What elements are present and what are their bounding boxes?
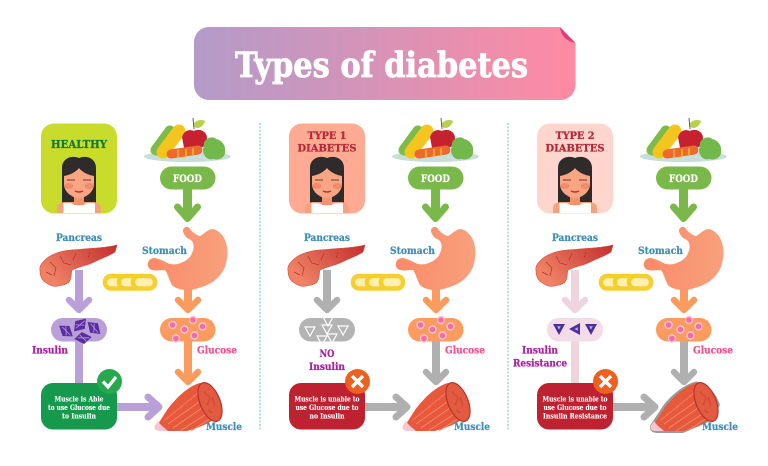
label: no insulin: NO — [320, 348, 334, 360]
outcome box: Muscle is Able — [54, 394, 104, 404]
label: glucose: Glucose — [693, 344, 733, 356]
insulin pill — [51, 315, 107, 347]
icon: food — [392, 118, 479, 162]
icon: food — [640, 118, 727, 162]
arrow: pancreas to insulin — [69, 270, 89, 310]
outcome box: Insulin Resistance — [543, 412, 607, 420]
icon: muscle — [650, 379, 723, 433]
outcome box: no Insulin — [310, 412, 345, 420]
outcome box: to use Glucose due — [48, 403, 110, 412]
food pill: FOOD — [669, 173, 698, 185]
outcome box — [289, 383, 365, 430]
insulin stem — [75, 340, 83, 386]
arrow: pancreas to insulin — [565, 270, 585, 310]
arrow: stomach to glucose — [426, 285, 446, 310]
outcome box: Muscle is unable to — [542, 394, 608, 404]
divider: left — [259, 123, 261, 431]
glucose pill — [656, 316, 712, 342]
food pill — [656, 166, 712, 190]
label: stomach: Stomach — [142, 245, 187, 257]
arrow: food to stomach — [674, 189, 694, 218]
insulin stem — [571, 340, 579, 386]
icon: muscle — [155, 379, 227, 431]
panel: healthy — [32, 118, 242, 433]
title banner — [194, 27, 576, 100]
type 2 portrait card: TYPE 2 — [556, 130, 594, 142]
label: pancreas: Pancreas — [552, 232, 598, 244]
label: stomach: Stomach — [638, 245, 683, 257]
icon: pancreas — [288, 245, 365, 286]
arrow: stomach to glucose — [674, 285, 694, 310]
label: glucose: Glucose — [445, 344, 485, 356]
label: muscle: Muscle — [702, 421, 738, 433]
food pill: FOOD — [421, 173, 450, 185]
icon: stomach — [644, 227, 723, 290]
icon: stomach — [396, 227, 475, 290]
label: insulin resistance: Resistance — [513, 358, 567, 370]
outcome box: use Glucose due to — [296, 403, 359, 412]
icon: cross badge — [345, 369, 370, 394]
icon: chain — [353, 276, 403, 288]
label: muscle: Muscle — [454, 421, 490, 433]
outcome box: Muscle is unable to — [294, 394, 360, 404]
glucose stem arrow — [178, 340, 198, 382]
title text: Types of diabetes — [235, 45, 528, 86]
icon: pancreas — [536, 245, 613, 286]
icon: stomach — [148, 227, 227, 290]
arrow: food to stomach — [426, 189, 446, 218]
label: no insulin: Insulin — [309, 361, 345, 373]
type 2 portrait card — [537, 124, 613, 214]
label: no insulin — [309, 348, 345, 373]
glucose stem arrow — [674, 340, 694, 382]
type 1 portrait card: DIABETES — [298, 142, 356, 154]
outcome box — [537, 383, 613, 430]
type 1 portrait card: TYPE 1 — [308, 130, 346, 142]
outcome box — [41, 383, 117, 430]
arrow: stomach to glucose — [178, 285, 198, 310]
label: insulin resistance: Insulin — [522, 344, 558, 356]
label: insulin: Insulin — [32, 344, 68, 356]
arrow: box to muscle — [115, 397, 159, 417]
healthy portrait card — [41, 124, 117, 214]
type 2 portrait card: DIABETES — [546, 142, 604, 154]
healthy portrait card: HEALTHY — [51, 138, 107, 151]
arrow: food to stomach — [178, 189, 198, 218]
label: insulin resistance — [513, 344, 567, 370]
icon: check badge — [97, 369, 122, 394]
glucose stem arrow — [426, 340, 446, 382]
icon: pancreas — [40, 245, 117, 286]
icon: muscle — [403, 379, 475, 431]
food pill — [408, 166, 464, 190]
label: pancreas: Pancreas — [304, 232, 350, 244]
divider: right — [507, 123, 509, 431]
icon: food — [144, 118, 231, 162]
icon: chain — [105, 276, 155, 288]
outcome box: to Insulin — [62, 412, 97, 420]
label: stomach: Stomach — [390, 245, 435, 257]
arrow: pancreas to no insulin — [317, 270, 337, 310]
outcome box: use Glucose due to — [544, 403, 607, 412]
no insulin pill — [299, 317, 355, 345]
panel: type 2 diabetes — [513, 118, 738, 433]
icon: cross badge — [593, 369, 618, 394]
insulin resistance pill — [547, 318, 603, 342]
glucose pill — [160, 316, 216, 342]
label: muscle: Muscle — [206, 421, 242, 433]
food pill — [160, 166, 216, 190]
icon: chain — [601, 276, 651, 288]
arrow: box to muscle — [363, 397, 407, 417]
type 1 portrait card — [289, 124, 365, 214]
food pill: FOOD — [173, 173, 202, 185]
panel: type 1 diabetes — [288, 118, 490, 433]
label: glucose: Glucose — [197, 344, 237, 356]
arrow: box to muscle — [611, 397, 655, 417]
glucose pill — [408, 316, 464, 342]
label: pancreas: Pancreas — [56, 232, 102, 244]
